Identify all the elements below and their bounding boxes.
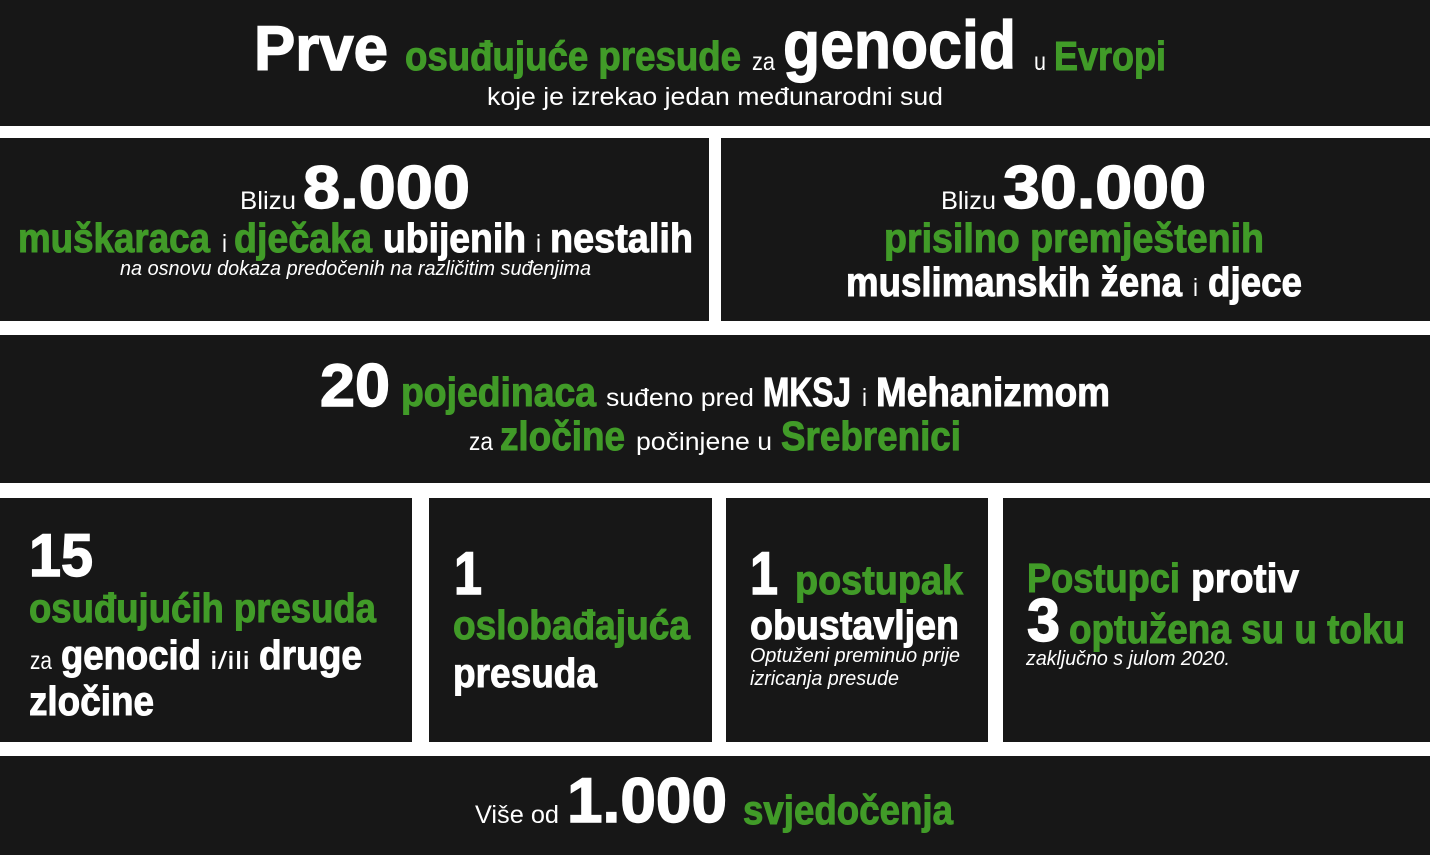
text: men and boys killed and missing: nestalih (550, 215, 693, 261)
subtitle: koje je izrekao jedan međunarodni sud (487, 83, 943, 111)
note: izricanja presude (750, 668, 899, 690)
heading: title line (254, 7, 1166, 84)
text: Muslim women and children: muslimanskih žena (846, 259, 1183, 305)
text: forcibly displaced: prisilno premještenih (884, 215, 1264, 261)
text: Muslim women and children: djece (1208, 259, 1302, 305)
text: line two: počinjene u (636, 428, 772, 456)
heading: title line: osuđujuće presude (405, 33, 741, 79)
panel: 8.000 men and boys (0, 138, 709, 321)
text: line two: Srebrenici (781, 413, 961, 459)
text: acquittal: oslobađajuća (453, 602, 691, 648)
stat: 1.000 testimonies: Više od (475, 801, 559, 829)
text: acquittal: presuda (453, 650, 598, 696)
stat: 30.000: 30.000 (1003, 154, 1206, 221)
heading: title line: u (1034, 48, 1046, 76)
stat: 1.000 testimonies: svjedočenja (743, 787, 954, 833)
text: line one (320, 352, 1110, 419)
panel: 15 convictions (0, 498, 412, 742)
text: men and boys killed and missing: ubijenih (383, 215, 526, 261)
panel: 1 acquittal (429, 498, 712, 742)
text: men and boys killed and missing (18, 215, 693, 261)
stat: 8.000: Blizu (240, 187, 296, 215)
text: line one: 20 (320, 352, 390, 419)
panel: 1 terminated proceeding (726, 498, 988, 742)
text: men and boys killed and missing: muškaraca (18, 215, 211, 261)
text: line two (469, 413, 961, 459)
text: line one: i (862, 384, 867, 412)
text: line two: zločine (500, 413, 625, 459)
stat: 1.000 testimonies (475, 766, 954, 836)
note: zaključno s julom 2020. (1025, 648, 1230, 670)
stat: 1 proceeding: postupak (795, 557, 963, 603)
text: genocide and other crimes: za (30, 647, 52, 675)
note: Optuženi preminuo prije (750, 645, 960, 667)
stat: 1.000 testimonies: 1.000 (567, 766, 727, 836)
stat: 8.000: 8.000 (303, 154, 470, 221)
text: line one: Mehanizmom (876, 369, 1110, 415)
text: genocide and other crimes: druge (259, 632, 362, 678)
panel: testimonies (0, 756, 1430, 855)
stat: 30.000: Blizu (941, 187, 996, 215)
text: acquittal (453, 602, 691, 696)
text: convictions: osuđujućih presuda (29, 585, 377, 631)
heading: title line: genocid (783, 7, 1016, 83)
heading: title line: Prve (254, 14, 388, 84)
text: proceedings against (1027, 555, 1299, 601)
text: line one: pojedinaca (401, 369, 597, 415)
panel: 3 ongoing proceedings (1003, 498, 1430, 742)
note: na osnovu dokaza predočenih na različitim suđenjima (120, 258, 591, 280)
stat: 8.000 (240, 154, 470, 221)
text: men and boys killed and missing: dječaka (234, 215, 373, 261)
text: Muslim women and children: i (1193, 274, 1198, 302)
stat: 3 accused: 3 (1027, 587, 1060, 654)
text: genocide and other crimes: genocid (61, 632, 201, 678)
stat: 15: 15 (29, 522, 93, 589)
text: line one: MKSJ (763, 369, 851, 415)
stat: 30.000 (941, 154, 1206, 221)
text: men and boys killed and missing: i (222, 230, 227, 258)
heading: title line: za (752, 48, 775, 76)
text: genocide and other crimes (29, 632, 362, 724)
text: genocide and other crimes: i/ili (210, 647, 250, 675)
text: men and boys killed and missing: i (536, 230, 541, 258)
panel: 30.000 women and children (721, 138, 1430, 321)
text: line one: suđeno pred (606, 384, 754, 412)
text: genocide and other crimes: zločine (29, 678, 154, 724)
stat: 3 accused (1027, 587, 1405, 654)
panel: title (0, 0, 1430, 126)
stat: 1: 1 (454, 540, 482, 607)
text: line two: za (469, 428, 493, 456)
stat: 1 proceeding (750, 540, 963, 607)
text: terminated: obustavljen (750, 602, 959, 648)
panel: 20 individuals (0, 335, 1430, 483)
text: proceedings against: protiv (1191, 555, 1299, 601)
text: proceedings against: Postupci (1027, 555, 1180, 601)
heading: title line: Evropi (1054, 33, 1166, 79)
stat: 1 proceeding: 1 (750, 540, 778, 607)
note (750, 645, 960, 690)
